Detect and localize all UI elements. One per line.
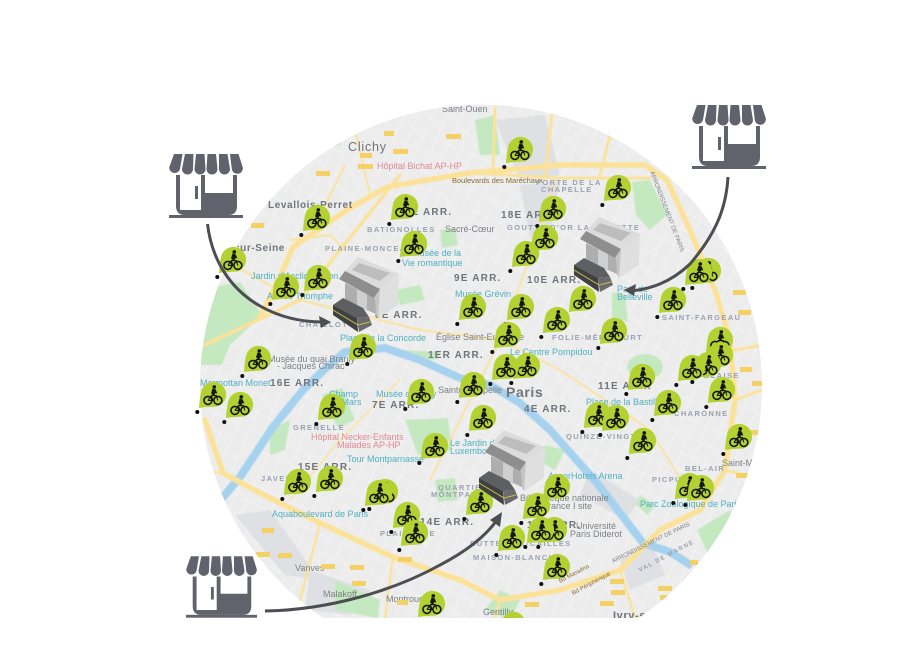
place and district labels: Le Centre Pompidou — [510, 347, 593, 357]
marker — [494, 525, 525, 557]
place and district labels: 9E ARR. — [454, 273, 501, 284]
bike courier markers — [195, 137, 752, 623]
place and district labels: Gentilly — [483, 607, 514, 617]
marker — [539, 307, 570, 339]
marker — [417, 433, 448, 465]
marker — [403, 379, 434, 411]
place and district labels: Sacré-Cœur — [445, 224, 495, 234]
marker — [465, 405, 496, 437]
place and district labels: sur-Seine — [234, 243, 285, 254]
marker — [625, 428, 656, 460]
marker — [455, 294, 486, 326]
marker — [535, 196, 566, 228]
marker — [314, 394, 345, 426]
place and district labels: de France I site — [530, 501, 592, 511]
place and district labels: CHAPELLE — [541, 185, 593, 194]
marker — [539, 474, 570, 506]
depot building and van 2 — [574, 217, 640, 292]
place and district labels: Vie romantique — [402, 258, 462, 268]
place and district labels: Hôpital Necker-Enfants — [311, 432, 404, 442]
marker — [596, 318, 627, 350]
store icon 3 — [186, 556, 257, 618]
place and district labels: 8E ARR. — [375, 310, 422, 321]
store icon 2 — [692, 105, 766, 169]
partial marker at bottom edge — [503, 612, 524, 618]
place and district labels: 11E ARR. — [598, 381, 652, 392]
place and district labels: BEL-AIR — [685, 464, 725, 473]
marker — [215, 247, 246, 279]
place and district labels: GOUTTE D'OR LA VILLETTE — [507, 223, 640, 232]
place and district labels: PLAISANCE — [380, 529, 436, 538]
place and district labels: Hôpital Bichat AP-HP — [377, 161, 462, 171]
marker — [527, 225, 558, 257]
marker — [702, 342, 733, 374]
place and district labels: Vanves — [295, 563, 325, 573]
marker — [502, 137, 533, 169]
arrow from store 3 to depot 3 — [265, 512, 502, 611]
depot building and van 3 — [479, 430, 545, 505]
place and district labels: Malakoff — [323, 589, 357, 599]
place and district labels: Église Saint-Eustache — [436, 332, 524, 342]
place and district labels: Place de la Bastille — [586, 397, 662, 407]
marker — [702, 327, 733, 359]
white mask below the map — [190, 618, 790, 665]
marker — [508, 241, 539, 273]
place and district labels: 18E ARR. — [501, 210, 555, 221]
place and district labels: Place de la Concorde — [340, 333, 426, 343]
marker — [387, 194, 418, 226]
map of Paris in a circle — [190, 95, 775, 630]
place and district labels: Le Jardin du — [450, 438, 500, 448]
place and district labels: Marmottan Monet — [200, 378, 271, 388]
marker — [683, 475, 714, 507]
marker — [690, 352, 721, 384]
place and district labels: CHARONNE — [674, 409, 729, 418]
place and district labels: ST BLAISE — [688, 371, 740, 380]
place and district labels: SAINT-FARGEAU — [662, 313, 741, 322]
marker — [519, 493, 550, 525]
marker — [222, 392, 253, 424]
place and district labels: Saint-Ouen — [442, 104, 488, 114]
marker — [345, 334, 376, 366]
place and district labels: Champ — [329, 389, 358, 399]
place and district labels: Musée d'Orsay — [376, 389, 437, 399]
place and district labels: Musée de la — [412, 248, 461, 258]
place and district labels: Musée du quai Branly — [268, 354, 356, 364]
marker — [523, 517, 554, 549]
place and district labels: MONTPARNASSE — [431, 490, 511, 499]
place and district labels: Paris Diderot — [570, 529, 623, 539]
marker — [396, 231, 427, 263]
place and district labels: 13E ARR. — [527, 520, 581, 531]
marker — [503, 294, 534, 326]
place and district labels: Ivry-sur-Seine — [613, 610, 695, 622]
place and district labels: Paris — [506, 384, 543, 400]
marker — [361, 480, 392, 512]
place and district labels — [200, 104, 773, 622]
depot building and van 1 — [333, 257, 399, 332]
store icon 1 — [169, 154, 243, 218]
marker — [539, 554, 570, 586]
place and district labels: Levallois-Perret — [268, 200, 353, 211]
place and district labels: CHAILLOT — [299, 320, 348, 329]
place and district labels: ARRONDISSEMENT DE PARIS — [611, 522, 691, 565]
marker — [600, 175, 631, 207]
place and district labels: de Mars — [329, 397, 362, 407]
parks — [196, 115, 736, 620]
place and district labels: Malades AP-HP — [337, 440, 401, 450]
place and district labels: 16E ARR. — [270, 378, 324, 389]
marker — [280, 469, 311, 501]
place and district labels: Aquaboulevard de Paris — [272, 509, 369, 519]
marker — [580, 402, 611, 434]
marker — [671, 473, 702, 505]
place and district labels: 10E ARR. — [527, 275, 581, 286]
marker — [195, 382, 226, 414]
marker — [690, 258, 721, 290]
place and district labels: 7E ARR. — [372, 400, 419, 411]
place and district labels: ARRONDISSEMENT DE PARIS — [648, 171, 684, 253]
place and district labels: 4E ARR. — [524, 404, 571, 415]
place and district labels: 1ER ARR. — [428, 350, 484, 361]
marker — [367, 479, 398, 511]
place and district labels: Tour Montparnasse — [347, 454, 424, 464]
marker — [312, 466, 343, 498]
road number shields — [251, 131, 763, 607]
place and district labels: GRENELLE — [293, 423, 345, 432]
place and district labels: Belleville — [617, 292, 653, 302]
marker — [268, 274, 299, 306]
place and district labels: Boulevards des Maréchaux — [452, 176, 543, 185]
place and district labels: BUTTE-AUX-CAILLES — [470, 539, 572, 548]
marker — [397, 520, 428, 552]
marker — [598, 405, 629, 437]
marker — [655, 287, 686, 319]
arrow from store 1 to depot 1 — [208, 224, 331, 328]
marker — [455, 372, 486, 404]
marker — [300, 265, 331, 297]
marker — [681, 259, 712, 291]
marker — [624, 364, 655, 396]
place and district labels: Musée Grévin — [455, 289, 511, 299]
place and district labels: Parc de — [617, 284, 648, 294]
place and district labels: Montrouge — [386, 594, 429, 604]
place and district labels: Clichy — [348, 140, 387, 154]
marker — [490, 322, 521, 354]
place and district labels: Bd Masséna — [558, 563, 591, 585]
place and district labels: MAISON-BLANCHE — [473, 553, 562, 562]
place and district labels: AccorHotels Arena — [548, 471, 623, 481]
place and district labels: PLAINE-MONCEAU — [325, 244, 413, 253]
place and district labels: PICPUS — [652, 475, 688, 484]
place and district labels: Université — [576, 521, 616, 531]
arrow from store 2 to depot 2 — [624, 177, 728, 296]
place and district labels: Luxembourg — [450, 446, 500, 456]
marker — [509, 353, 540, 385]
marker — [389, 502, 420, 534]
river Seine — [208, 348, 692, 566]
place and district labels: FOLIE-MÉRICOURT — [552, 333, 643, 342]
place and district labels: 14E ARR. — [420, 517, 474, 528]
place and district labels: Sainte-Chapelle — [438, 385, 502, 395]
marker — [704, 377, 735, 409]
place and district labels: QUINZE-VINGTS — [566, 432, 643, 441]
place and district labels: QUARTIER — [438, 483, 488, 492]
place and district labels: 15E ARR. — [298, 462, 352, 473]
place and district labels: Bd Périphérique — [571, 571, 613, 597]
place and district labels: JAVEL — [261, 474, 292, 483]
place and district labels: Parc Zoologique de Paris — [640, 499, 742, 509]
place and district labels: Arc de Triomphe — [267, 291, 333, 301]
marker — [536, 517, 567, 549]
place and district labels: PORTE DE LA — [536, 178, 602, 187]
marker — [240, 346, 271, 378]
marker — [299, 205, 330, 237]
marker — [462, 489, 493, 521]
marker — [721, 424, 752, 456]
marker — [674, 355, 705, 387]
place and district labels: BATIGNOLLES — [367, 225, 436, 234]
marker — [414, 591, 445, 623]
marker — [488, 354, 519, 386]
place and district labels: Saint-Mandé — [722, 458, 773, 468]
gray rail and industrial zones — [235, 115, 665, 615]
place and district labels: - Jacques Chirac — [277, 361, 345, 371]
place and district labels: VAL DE MARNE — [638, 539, 696, 574]
place and district labels: Jardin d'Acclimatation — [251, 271, 338, 281]
marker — [565, 286, 596, 318]
place and district labels: Bibliothèque nationale — [520, 493, 609, 503]
main roads — [190, 105, 762, 618]
place and district labels: 17E ARR. — [398, 207, 452, 218]
marker — [650, 390, 681, 422]
